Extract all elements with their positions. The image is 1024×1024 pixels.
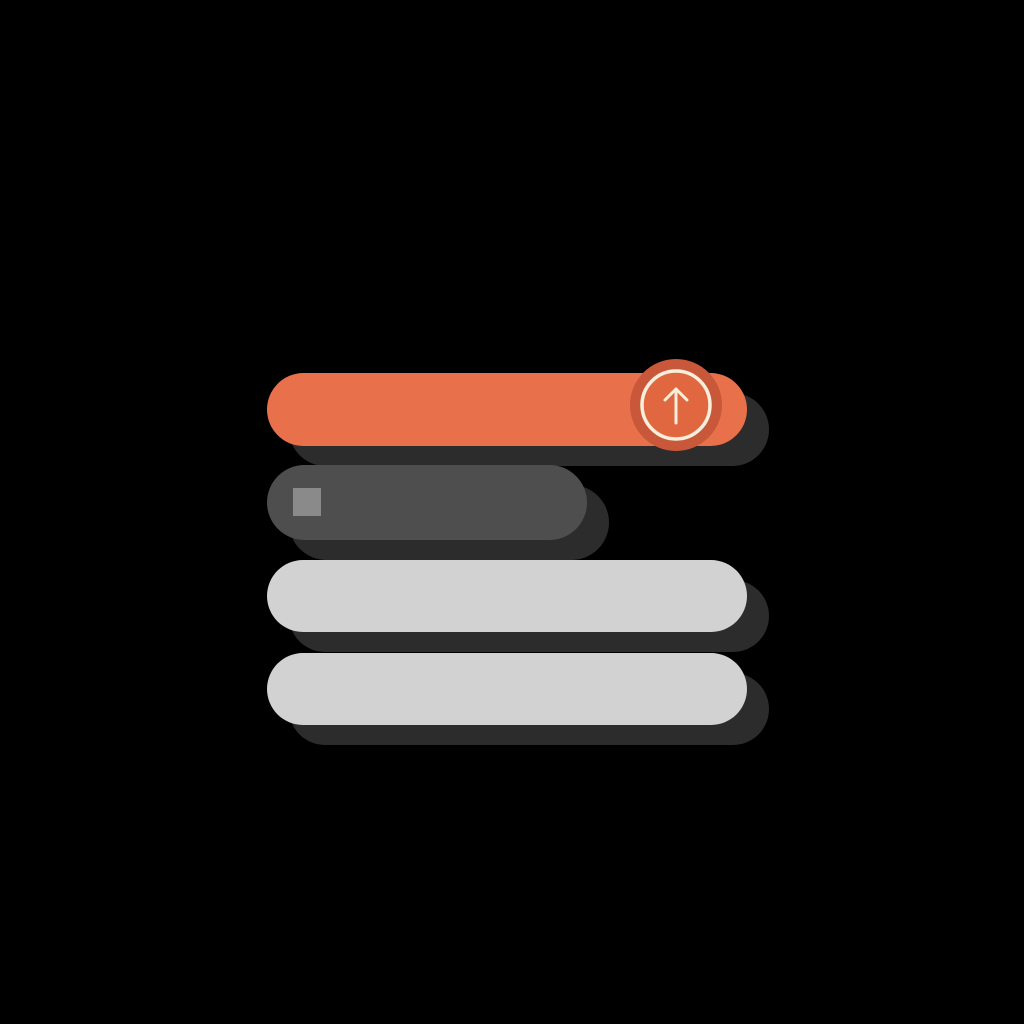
bar: dark gray short <box>267 465 609 560</box>
bar: orange highlighted <box>267 359 769 466</box>
icon: square <box>293 488 321 516</box>
bar: light gray 2 <box>267 653 769 745</box>
bar: light gray 1 <box>267 560 769 652</box>
icon: up arrow circle <box>630 359 722 451</box>
